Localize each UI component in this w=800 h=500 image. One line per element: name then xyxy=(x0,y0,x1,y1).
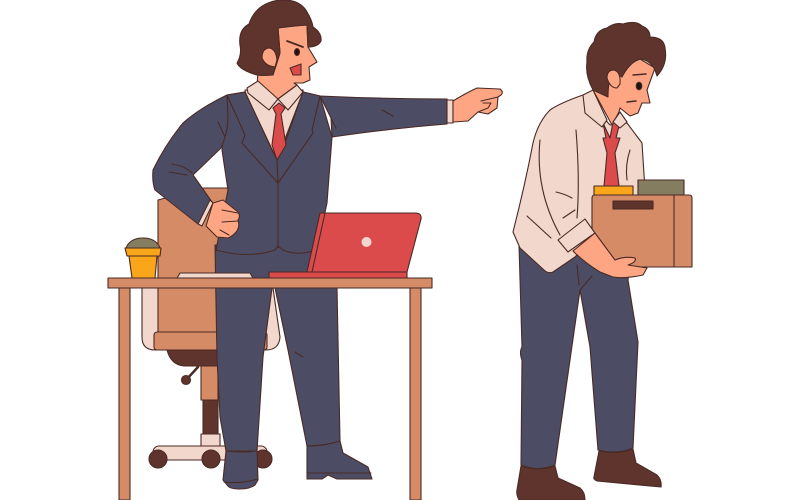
employee sad brow, eye, mouth xyxy=(627,74,646,102)
employee curly hair xyxy=(587,22,666,97)
boss collar xyxy=(247,81,303,110)
employee trousers xyxy=(519,245,638,468)
cardboard box xyxy=(592,195,692,267)
boss cuff and pointing hand xyxy=(447,100,453,123)
boss ear xyxy=(262,48,277,67)
employee shirt xyxy=(513,95,645,273)
boss angry eyebrow and eye xyxy=(287,41,303,47)
office chair xyxy=(142,188,280,468)
boss jacket lapels xyxy=(227,92,320,183)
laptop xyxy=(307,213,421,272)
employee face and neck xyxy=(593,59,655,125)
employee shoes xyxy=(517,466,585,500)
employee carrying box xyxy=(513,22,692,500)
plant pot xyxy=(126,238,160,248)
employee collar xyxy=(583,90,627,128)
boss boots xyxy=(223,451,258,489)
boss shirt xyxy=(245,90,303,161)
boss hair xyxy=(237,0,321,75)
desk paper xyxy=(177,273,253,278)
boss pointing arm xyxy=(320,96,447,137)
boss jacket torso xyxy=(216,92,332,254)
box contents xyxy=(594,186,633,195)
boss bent arm xyxy=(153,95,228,224)
desk top and legs xyxy=(119,288,130,500)
employee ear xyxy=(607,70,620,88)
desk xyxy=(108,213,432,500)
employee forearm and hand xyxy=(573,233,647,278)
boss figure xyxy=(153,0,502,489)
boss open mouth xyxy=(290,64,301,75)
boss red tie xyxy=(272,103,286,160)
boss trousers xyxy=(215,245,340,451)
boss cuff and hand on hip xyxy=(198,200,213,226)
employee sleeve cuff xyxy=(558,219,595,252)
boss face and neck xyxy=(257,25,317,99)
employee red tie xyxy=(603,122,620,186)
